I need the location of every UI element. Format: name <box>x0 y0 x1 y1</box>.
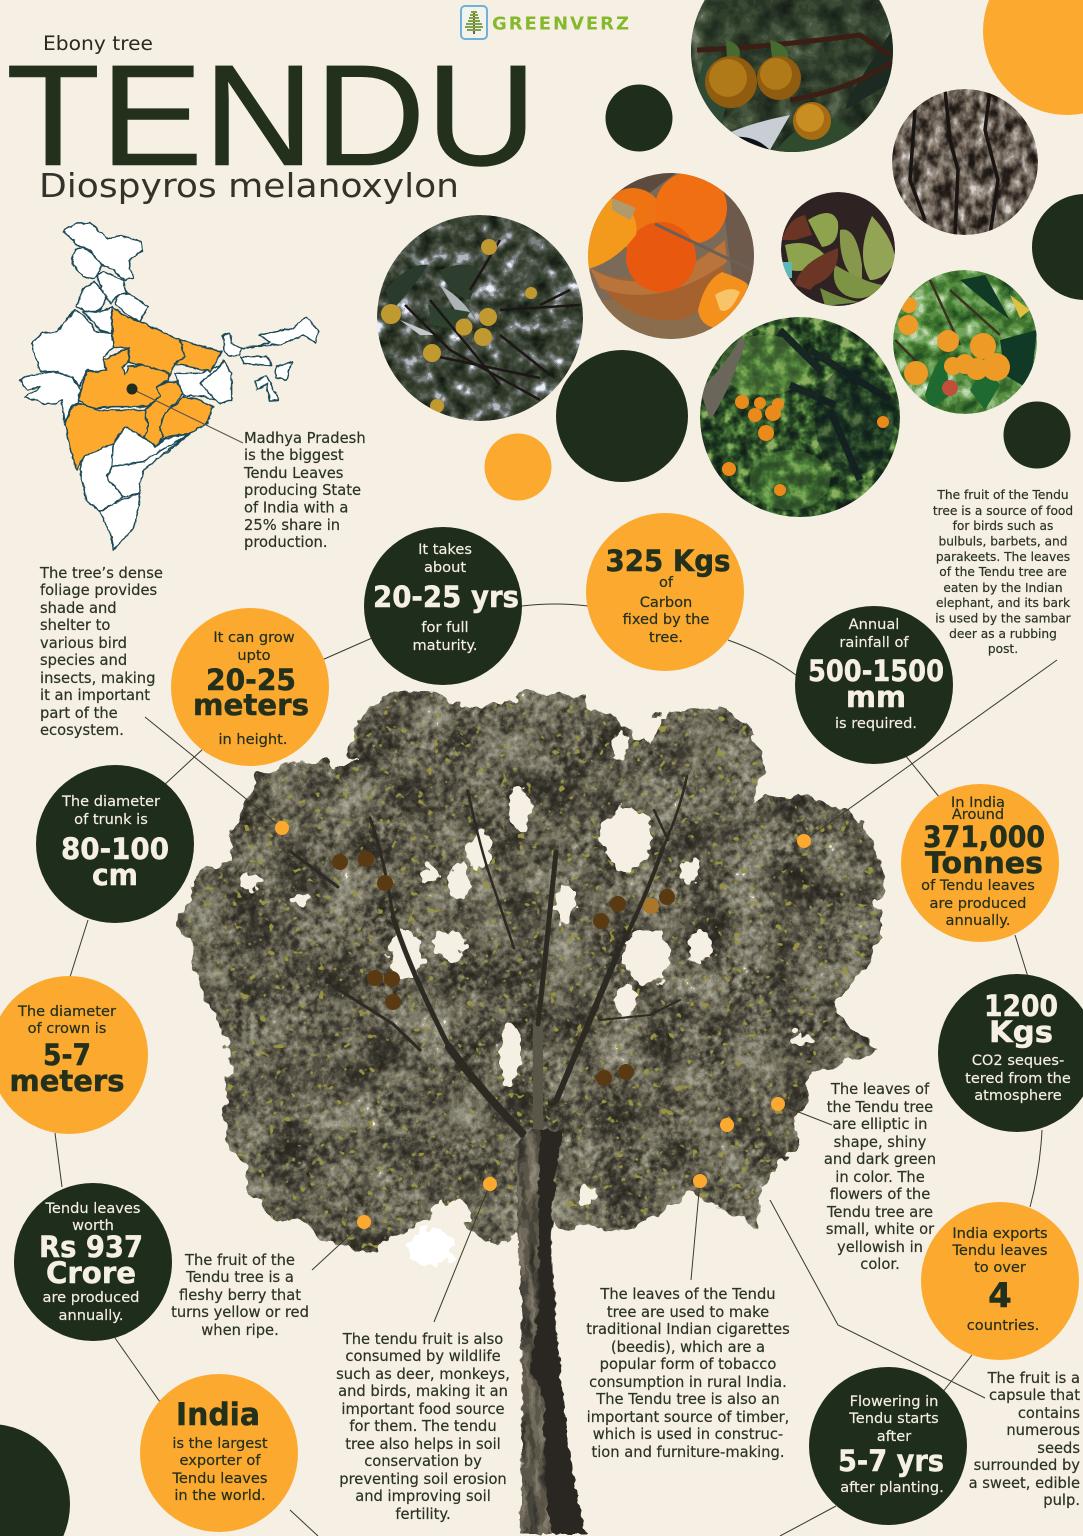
text: capsule: a sweet, edible <box>969 1475 1080 1492</box>
circle: India production: are produced <box>930 895 1026 912</box>
text: beedis and timber: popular form of tobacco <box>600 1356 776 1373</box>
text: Madhya Pradesh: production. <box>244 534 328 551</box>
circle: crown diameter: meters <box>10 1064 124 1098</box>
text: beedis and timber: (beedis), which are a <box>611 1339 765 1356</box>
circle: largest exporter: exporter of <box>180 1452 261 1469</box>
circle: height: meters <box>193 688 309 722</box>
circle: height: in height. <box>218 731 288 748</box>
text: leaves elliptic: shape, shiny <box>834 1134 927 1151</box>
text: fleshy berry: turns yellow or red <box>171 1304 309 1321</box>
tree: canopy <box>177 691 882 1254</box>
text: fruit consumed by wildlife: and improving soil <box>355 1488 491 1505</box>
text: beedis and timber: tree are used to make <box>607 1304 769 1321</box>
logo: Greenverz: GREENVERZ <box>492 14 629 34</box>
tree: gaps in canopy <box>238 731 810 1229</box>
circle: rainfall: rainfall of <box>839 634 909 651</box>
text: foliage provides shade: various bird <box>40 635 127 652</box>
circle: India production: In India <box>951 794 1005 811</box>
text: foliage provides shade: foliage provides <box>40 582 157 599</box>
text: foliage provides shade: it an important <box>40 687 150 704</box>
circle: CO2 sequestered: CO2 seques- <box>972 1052 1064 1069</box>
photo: tendu branch with fruit <box>377 215 583 421</box>
circle: leaves worth <box>14 1183 172 1341</box>
text: fruit consumed by wildlife: and birds, making it an <box>338 1383 508 1400</box>
text: leaves elliptic: Tendu tree are <box>826 1204 933 1221</box>
circle: crown diameter: of crown is <box>28 1020 106 1037</box>
text: Madhya Pradesh: 25% share in <box>244 517 340 534</box>
text: leaves elliptic: in color. The <box>835 1169 925 1186</box>
text: foliage provides shade: The tree’s dense <box>39 565 163 582</box>
text: fruit as food for birds: eaten by the Indian <box>943 581 1063 595</box>
circle: trunk diameter: 80-100 <box>61 832 169 866</box>
circle: crown diameter: 5-7 <box>43 1038 91 1072</box>
text: fleshy berry: when ripe. <box>201 1322 279 1339</box>
title: TENDU: TENDU <box>6 35 537 196</box>
text: beedis and timber: important source of timber, <box>587 1409 789 1426</box>
text: foliage provides shade: part of the <box>40 705 118 722</box>
text: foliage provides shade: shelter to <box>40 617 110 634</box>
text: capsule: numerous <box>1006 1422 1080 1439</box>
text: capsule: The fruit is a <box>987 1370 1080 1387</box>
circle: crown diameter: The diameter <box>17 1003 116 1020</box>
text: beedis and timber: The Tendu tree is also an <box>595 1391 780 1408</box>
circle: India production <box>901 784 1059 942</box>
circle: rainfall: mm <box>846 680 906 714</box>
text: capsule: capsule that <box>989 1387 1080 1404</box>
circle: leaves worth: Crore <box>46 1256 136 1290</box>
circle: maturity: It takes <box>418 541 472 558</box>
text: beedis and timber: consumption in rural India. <box>589 1374 787 1391</box>
text: fruit consumed by wildlife: such as deer, monkeys, <box>336 1366 510 1383</box>
text: fruit as food for birds: of the Tendu tree are <box>939 565 1067 579</box>
map marker and leader <box>126 384 243 443</box>
circle: leaves worth: annually. <box>59 1307 123 1324</box>
subtitle: Ebony tree: Ebony tree <box>43 32 153 55</box>
circle: exports: to over <box>974 1259 1026 1276</box>
circle: exports: 4 <box>988 1276 1012 1316</box>
tree: white patch <box>407 1229 455 1265</box>
text: Madhya Pradesh: producing State <box>244 482 361 499</box>
tree: trunk <box>514 1130 586 1534</box>
circle: rainfall <box>795 606 953 764</box>
circle: trunk diameter: cm <box>92 858 138 892</box>
circle: maturity: about <box>424 559 466 576</box>
text: leaves elliptic: flowers of the <box>830 1186 930 1203</box>
circle: India production: Around <box>952 806 1004 823</box>
circle: trunk diameter: The diameter <box>61 793 160 810</box>
text: beedis and timber: which is used in construc- <box>593 1426 783 1443</box>
text: leaves elliptic: yellowish in <box>837 1239 923 1256</box>
text: fleshy berry: fleshy berry that <box>179 1287 301 1304</box>
text: capsule: contains <box>1018 1405 1080 1422</box>
circle: trunk diameter <box>36 765 194 923</box>
circle: flowering: Tendu starts <box>848 1410 939 1427</box>
text: leaves elliptic: small, white or <box>826 1221 935 1238</box>
circle: largest exporter <box>140 1374 298 1532</box>
circle: height: 20-25 <box>206 663 296 697</box>
circle: leaves worth: worth <box>72 1217 114 1234</box>
text: foliage provides shade: insects, making <box>40 670 155 687</box>
circle: largest exporter: India <box>176 1397 260 1433</box>
text: leaves elliptic: and dark green <box>824 1151 936 1168</box>
text: Madhya Pradesh: of India with a <box>244 500 348 516</box>
text: fruit consumed by wildlife: preventing soil erosion <box>339 1471 507 1488</box>
circle: height <box>171 608 329 766</box>
text: fruit as food for birds: The fruit of the Tendu <box>936 488 1069 502</box>
logo: Greenverz <box>461 6 629 39</box>
photo: green tree with orange fruit <box>700 317 900 517</box>
tree: fruits <box>332 851 675 1086</box>
text: fruit as food for birds: deer as a rubbing <box>949 627 1057 641</box>
circle: India production: of Tendu leaves <box>921 877 1035 894</box>
circle: carbon fixed <box>586 513 744 671</box>
text: fruit as food for birds: bulbuls, barbets, and <box>938 534 1068 548</box>
text: fruit consumed by wildlife: important food source <box>341 1401 505 1418</box>
circle: maturity <box>364 527 522 685</box>
circle: exports <box>921 1202 1079 1360</box>
circle: leaves worth: are produced <box>43 1289 139 1306</box>
circle: flowering <box>809 1367 967 1525</box>
text: fruit consumed by wildlife: consumed by wildlife <box>345 1348 501 1365</box>
circle: exports: Tendu leaves <box>951 1242 1048 1259</box>
circle: rainfall: 500-1500 <box>808 654 944 688</box>
text: fruit as food for birds: is used by the sambar <box>935 612 1072 626</box>
circle: maturity: for full <box>421 619 469 636</box>
circle: CO2 sequestered <box>938 974 1083 1132</box>
text: fruit as food for birds: elephant, and its bark <box>936 596 1071 610</box>
circle: CO2 sequestered: atmosphere <box>974 1087 1062 1104</box>
circle: largest exporter: in the world. <box>174 1487 266 1504</box>
text: beedis and timber: The leaves of the Tendu <box>599 1286 776 1303</box>
text: Madhya Pradesh: Madhya Pradesh <box>244 430 366 447</box>
text: beedis and timber: traditional Indian cigarettes <box>586 1321 790 1338</box>
leader lines and ring connectors <box>55 604 1057 1536</box>
circle: exports: India exports <box>952 1225 1048 1242</box>
text: leaves elliptic: the Tendu tree <box>827 1099 933 1116</box>
circle: height: It can grow <box>213 629 295 646</box>
circle: flowering: Flowering in <box>850 1393 938 1410</box>
circle: flowering: 5-7 yrs <box>838 1444 944 1478</box>
text: fruit as food for birds: parakeets. The leaves <box>936 550 1070 564</box>
circle: carbon fixed: Carbon <box>640 594 692 611</box>
text: leaves elliptic: The leaves of <box>830 1081 930 1098</box>
text: capsule: pulp. <box>1043 1492 1080 1509</box>
circle: carbon fixed: of <box>659 574 674 591</box>
circle: carbon fixed: tree. <box>649 629 683 646</box>
photo: leaves in hands <box>781 192 895 306</box>
text: foliage provides shade: ecosystem. <box>40 722 124 739</box>
circle: maturity: maturity. <box>412 637 478 654</box>
text: fleshy berry: The fruit of the <box>184 1252 295 1269</box>
text: foliage provides shade: shade and <box>40 600 117 617</box>
circle: largest exporter: Tendu leaves <box>171 1470 268 1487</box>
photo: fruit on branch <box>691 0 893 152</box>
text: fruit as food for birds: post. <box>988 642 1018 656</box>
text: fruit consumed by wildlife: The tendu fruit is also <box>342 1331 503 1348</box>
text: Madhya Pradesh: is the biggest <box>244 447 344 464</box>
map: India with tendu-producing states <box>20 223 318 550</box>
text: beedis and timber: tion and furniture-making. <box>591 1444 785 1461</box>
text: fruit as food for birds: tree is a source of food <box>933 504 1073 518</box>
circle: flowering: after <box>877 1428 911 1445</box>
photo: persimmons in bowl <box>588 170 760 340</box>
circle: exports: countries. <box>967 1317 1039 1334</box>
circle: CO2 sequestered: 1200 <box>984 989 1058 1023</box>
circle: carbon fixed: fixed by the <box>623 611 709 628</box>
tree: callout dots <box>275 821 811 1229</box>
text: fruit consumed by wildlife: for them. The tendu <box>349 1418 497 1435</box>
circle: CO2 sequestered: Kgs <box>989 1015 1053 1049</box>
circle: height: upto <box>237 647 271 664</box>
text: capsule: seeds <box>1037 1440 1080 1457</box>
circle: crown diameter <box>0 976 148 1134</box>
circle: CO2 sequestered: tered from the <box>965 1070 1071 1087</box>
circle: largest exporter: is the largest <box>172 1435 268 1452</box>
circle: carbon fixed: 325 Kgs <box>606 544 730 578</box>
circle: trunk diameter: of trunk is <box>74 811 148 828</box>
photo: ripe fruit cluster <box>893 270 1037 414</box>
text: leaves elliptic: are elliptic in <box>832 1116 928 1133</box>
photo: bark <box>892 89 1038 235</box>
scientific name: Diospyros melanoxylon <box>39 166 459 205</box>
text: fruit consumed by wildlife: fertility. <box>395 1506 451 1523</box>
circle: leaves worth: Tendu leaves <box>44 1200 141 1217</box>
tree: branches <box>291 776 687 1139</box>
circle: maturity: 20-25 yrs <box>373 580 519 614</box>
circle: leaves worth: Rs 937 <box>39 1230 143 1264</box>
circle: India production: annually. <box>946 912 1010 929</box>
circle: flowering: after planting. <box>840 1479 944 1496</box>
text: Madhya Pradesh: Tendu Leaves <box>243 465 343 482</box>
circle: rainfall: is required. <box>835 715 917 732</box>
circle: rainfall: Annual <box>849 616 899 633</box>
text: foliage provides shade: species and <box>40 652 127 669</box>
circle: India production: 371,000 <box>923 820 1045 854</box>
text: leaves elliptic: color. <box>860 1256 900 1273</box>
text: fruit consumed by wildlife: conservation by <box>364 1453 482 1470</box>
circle: India production: Tonnes <box>925 846 1043 880</box>
text: capsule: surrounded by <box>974 1457 1080 1474</box>
text: fruit consumed by wildlife: tree also helps in soil <box>345 1436 501 1453</box>
text: fruit as food for birds: for birds such as <box>953 519 1053 533</box>
text: fleshy berry: Tendu tree is a <box>185 1269 294 1286</box>
